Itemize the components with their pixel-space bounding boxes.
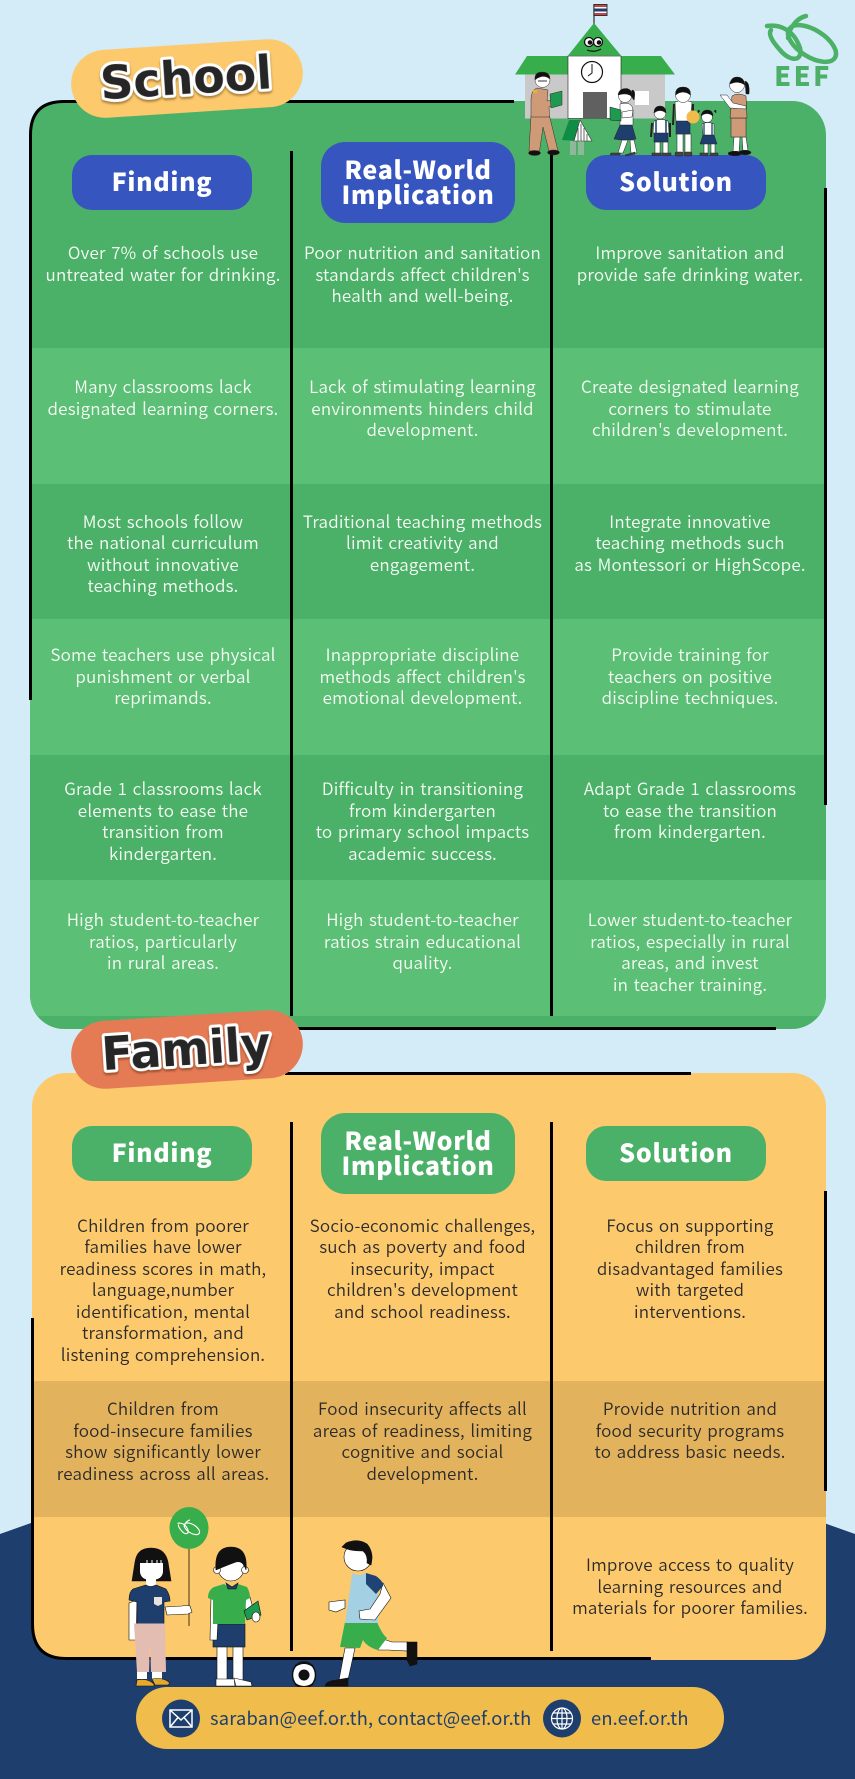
school row 5 implication: from kindergarten [349,797,496,822]
family column divider 1 [290,1122,293,1651]
school row 2 finding [48,373,278,420]
family row 2 finding [57,1395,269,1485]
family row 1 finding: transformation, and [82,1319,244,1344]
school row 4 finding: Some teachers use physical [50,641,276,666]
school row 1 solution: Improve sanitation and [595,239,785,264]
heading: school real-world implication: Implication [341,176,495,212]
family row 1 solution: disadvantaged families [597,1255,783,1280]
school row 4 implication: emotional development. [323,684,522,709]
family row 2 band [32,1381,826,1517]
heading: family real-world implication: Real-World [344,1122,492,1158]
heading: family solution: Solution [619,1134,733,1170]
school row 5 implication [316,775,529,865]
icon: EEF logo: EEF [774,55,832,94]
school row 6 implication [324,906,521,974]
school row 2 solution [581,373,799,441]
family row 1 solution: with targeted [636,1276,744,1301]
flag [594,4,607,24]
family row 1 finding: listening comprehension. [61,1341,265,1366]
school row 2 solution: children's development. [592,416,788,441]
heading: school real-world implication: Real-World [344,150,492,186]
family row 1 implication: insecurity, impact [350,1255,495,1280]
school row 5 implication: to primary school impacts [316,818,529,843]
heading: school solution: Solution [619,163,733,199]
school row 2 implication [309,373,536,441]
school row 4 solution [602,641,778,709]
heading: school solution [586,155,766,210]
heading: family real-world implication [321,1113,515,1194]
school row 2 finding: Many classrooms lack [74,373,252,398]
school row 1 implication [304,239,541,307]
illustration: female teacher [720,77,751,156]
school row 5 implication: academic success. [348,840,497,865]
school row 4 finding: reprimands. [114,684,212,709]
family row 1 implication: children's development [327,1276,518,1301]
family row 2 implication: areas of readiness, limiting [313,1417,532,1442]
school row 3 finding: Most schools follow [83,508,243,532]
illustration: tall boy [673,87,700,156]
school row 3 implication: limit creativity and [346,529,499,554]
roof face [584,38,602,51]
family row 3 solution: learning resources and [597,1573,783,1598]
row 4 band [30,619,826,755]
school row 5 finding: Grade 1 classrooms lack [64,775,262,800]
heading: school finding [72,155,252,210]
school row 3 solution: as Montessori or HighScope. [574,551,806,576]
family row 1 finding [60,1212,266,1366]
email text: saraban@eef.or.th, contact@eef.or.th [210,1705,531,1731]
school row 4 solution: discipline techniques. [602,684,778,709]
family row 2 finding: show significantly lower [65,1438,261,1463]
school row 3 finding: the national curriculum [67,529,259,554]
school row 1 solution: provide safe drinking water. [577,261,803,286]
school title badge: School [98,46,274,110]
school column divider 1 [290,151,293,1016]
family row 1 finding: Children from poorer [77,1212,249,1236]
school row 5 finding: kindergarten. [109,840,217,865]
school row 2 solution: Create designated learning [581,373,799,398]
school row 1 implication: health and well-being. [332,282,514,307]
school row 2 finding: designated learning corners. [48,395,278,420]
school row 4 implication: Inappropriate discipline [326,641,519,666]
school row 6 implication: quality. [392,949,453,974]
family row 3 solution: materials for poorer families. [572,1594,808,1619]
school row 6 solution: Lower student-to-teacher [588,906,792,931]
school row 2 implication: Lack of stimulating learning [309,373,536,398]
heading: family finding: Finding [112,1134,212,1170]
school row 4 implication: methods affect children's [319,663,526,688]
family row 1 implication: Socio-economic challenges, [310,1212,535,1236]
school row 5 solution: Adapt Grade 1 classrooms [584,775,796,800]
illustration: boy with book [208,1547,261,1686]
school row 1 solution [577,239,803,286]
family row 1 implication: such as poverty and food [319,1233,526,1258]
school row 5 solution: to ease the transition [603,797,777,822]
illustration: balloon [170,1507,208,1626]
family row 2 solution: food security programs [596,1417,784,1442]
school row 2 implication: environments hinders child [311,395,534,420]
school row 6 finding: ratios, particularly [89,928,237,953]
school row 1 finding: Over 7% of schools use [68,239,258,264]
family row 1 implication [310,1212,535,1323]
school row 5 implication: Difficulty in transitioning [322,775,523,800]
family row 3 solution: Improve access to quality [586,1551,794,1576]
family title badge: Family [100,1017,272,1081]
family row 1 finding: identification, mental [76,1298,250,1323]
school column divider 2 [550,151,553,1016]
school row 4 solution: Provide training for [611,641,769,666]
illustration: male teacher [528,72,562,156]
family title badge [69,1008,305,1091]
school row 1 implication: standards affect children's [315,261,530,286]
school row 6 finding: in rural areas. [107,949,219,974]
panel: family [32,1073,826,1660]
school row 6 finding [67,906,260,974]
family row 2 finding: readiness across all areas. [57,1460,269,1485]
school row 3 implication: Traditional teaching methods [303,508,542,532]
school row 5 finding [64,775,262,865]
family row 1 solution: children from [635,1233,745,1258]
school row 6 implication: ratios strain educational [324,928,521,953]
school row 3 solution: Integrate innovative [609,508,771,532]
school row 1 finding: untreated water for drinking. [46,261,280,286]
website text: en.eef.or.th [591,1705,689,1731]
school row 3 finding [67,508,259,597]
contact bar [136,1687,724,1749]
family row 1 finding: families have lower [84,1233,242,1258]
illustration: schoolgirl [610,88,637,156]
school row 4 solution: teachers on positive [608,663,772,688]
window [635,91,649,105]
family row 2 implication: development. [366,1460,478,1485]
door [583,92,607,118]
school row 2 implication: development. [366,416,478,441]
heading: school real-world implication [321,142,515,223]
panel: school [30,101,826,1029]
heading: family solution [586,1126,766,1181]
school row 4 implication [319,641,526,709]
school row 3 solution: teaching methods such [595,529,785,554]
school row 4 finding: punishment or verbal [75,663,251,688]
grey wings [525,74,665,118]
school row 3 finding: teaching methods. [88,572,238,597]
school row 3 implication: engagement. [370,551,475,576]
school row 6 finding: High student-to-teacher [67,906,259,931]
icon: envelope [162,1700,200,1738]
heading: family finding [72,1126,252,1181]
illustration: running boy [325,1541,417,1686]
illustration: soccer ball [292,1662,316,1688]
illustration: girl with balloon [129,1548,192,1686]
illustration: school building [515,4,675,118]
family row 2 implication: Food insecurity affects all [318,1395,527,1420]
icon: EEF logo [767,16,842,94]
school row 3 solution [574,508,806,576]
family row 1 solution: Focus on supporting [606,1212,774,1236]
side roofs [515,56,675,74]
school row 3 implication [303,508,542,576]
family row 1 solution [597,1212,783,1323]
school row 4 finding [50,641,276,709]
family row 2 implication: cognitive and social [342,1438,503,1463]
heading: school finding: Finding [112,163,212,199]
school row 1 finding [46,239,280,286]
family column divider 2 [550,1122,553,1651]
illustration: book character [562,120,592,155]
family row 2 solution: Provide nutrition and [603,1395,777,1420]
family row 2 implication [313,1395,532,1485]
school row 5 finding: elements to ease the [78,797,248,822]
family row 2 finding: food-insecure families [73,1417,253,1442]
school row 6 solution: areas, and invest [621,949,759,974]
school row 3 finding: without innovative [87,551,239,576]
tower roof [568,23,621,56]
family row 1 implication: and school readiness. [334,1298,511,1323]
school row 5 solution [584,775,796,843]
family row 3 solution [572,1551,808,1619]
family row 2 solution [594,1395,786,1463]
school row 2 solution: corners to stimulate [608,395,772,420]
school row 6 implication: High student-to-teacher [326,906,519,931]
school row 5 solution: from kindergarten. [614,818,766,843]
family row 1 solution: interventions. [634,1298,746,1323]
heading: family real-world implication: Implication [341,1146,495,1182]
school row 1 implication: Poor nutrition and sanitation [304,239,541,264]
family row 1 finding: language,number [92,1276,234,1301]
school row 6 solution: ratios, especially in rural [590,928,790,953]
family row 1 finding: readiness scores in math, [60,1255,266,1280]
family row 2 finding: Children from [107,1395,219,1420]
clock [582,62,602,82]
family row 2 solution: to address basic needs. [594,1438,786,1463]
school row 5 finding: transition from [102,818,224,843]
row 6 band [30,880,826,1016]
white tower [568,56,621,118]
icon: globe [543,1700,581,1738]
school title badge [69,37,305,120]
row 2 band [30,348,826,484]
illustration: small girl [698,110,718,156]
illustration: small boy [651,106,671,156]
school row 6 solution [588,906,792,996]
school row 6 solution: in teacher training. [613,971,767,996]
